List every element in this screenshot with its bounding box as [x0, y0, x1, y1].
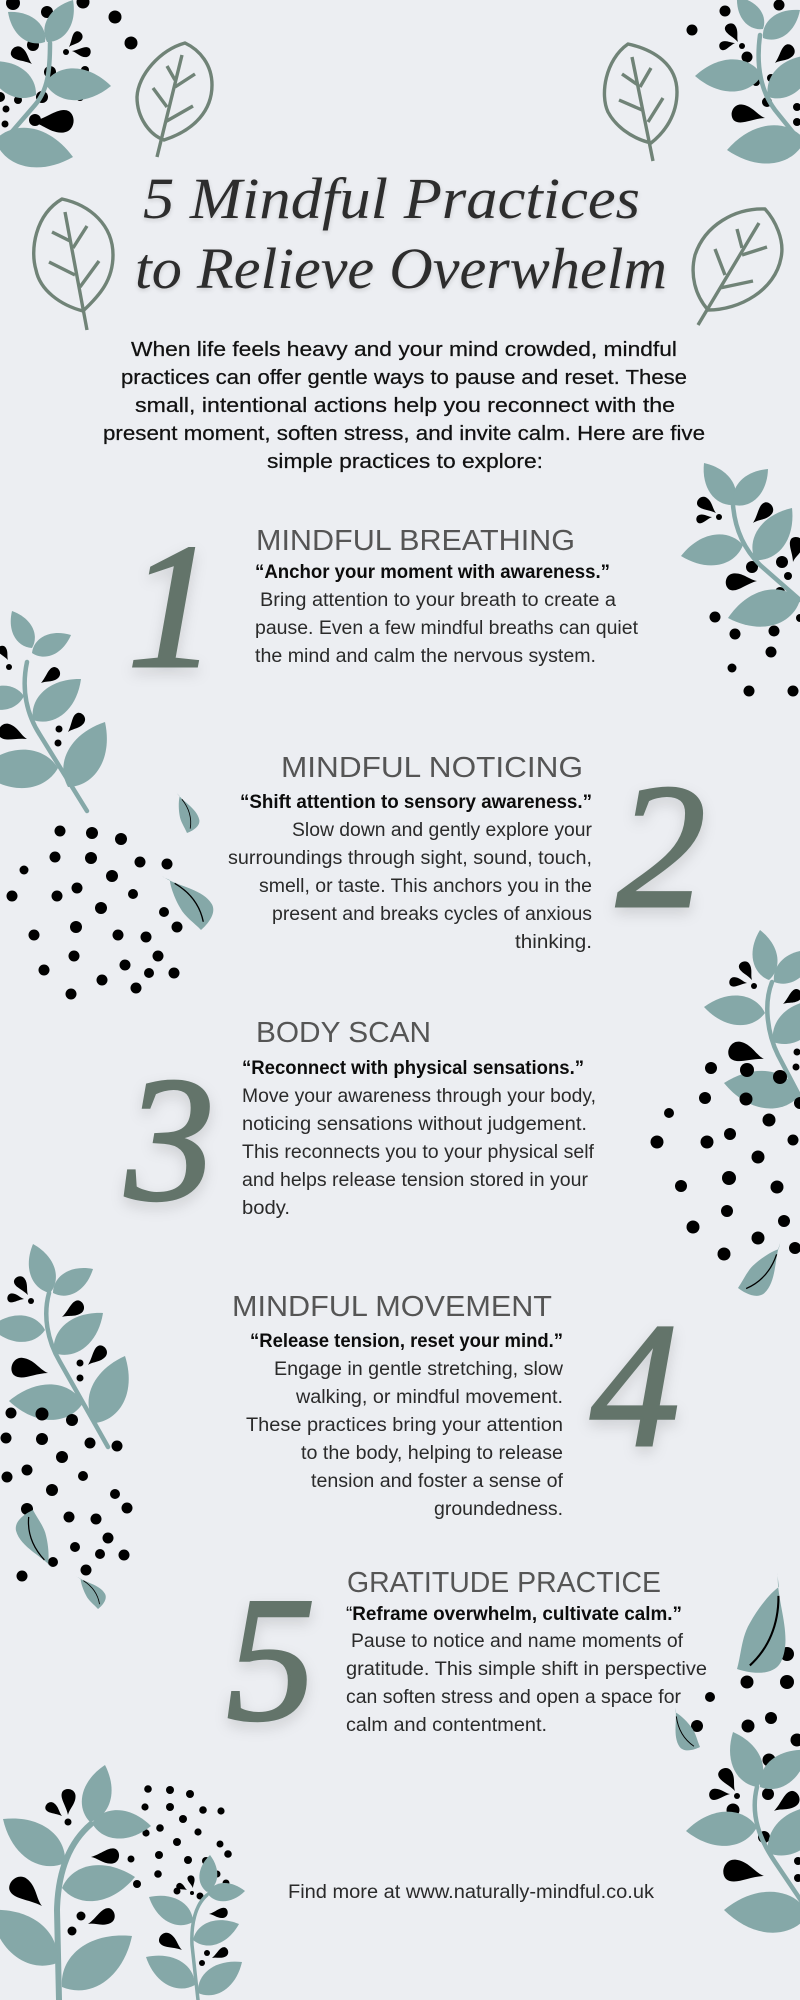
- section 2: mindful noticing: [228, 747, 706, 953]
- body 4: walking, or mindful movement.: [295, 1387, 563, 1408]
- body 2: present and breaks cycles of anxious: [272, 904, 592, 925]
- intro text: practices can offer gentle ways to pause and reset. These: [121, 366, 687, 389]
- title: 5 Mindful Practices: [143, 166, 640, 231]
- section 3: body scan: [124, 1017, 596, 1238]
- body 5: calm and contentment.: [346, 1715, 547, 1736]
- body 3: and helps release tension stored in your: [242, 1170, 589, 1191]
- body 5: [346, 1604, 707, 1736]
- body 2: “Shift attention to sensory awareness.”: [240, 792, 592, 813]
- icon: outline leaf top right: [604, 44, 677, 161]
- title: [135, 166, 667, 301]
- body 3: This reconnects you to your physical self: [242, 1142, 595, 1163]
- body 3: noticing sensations without judgement.: [242, 1114, 587, 1135]
- sprig: right of section 3 with dots: [650, 928, 800, 1304]
- sprig: bottom left large: [0, 1761, 152, 2000]
- intro text: [103, 338, 705, 473]
- title: to Relieve Overwhelm: [135, 236, 667, 301]
- body 2: thinking.: [515, 932, 592, 953]
- sprig: bottom left small: [139, 1854, 249, 2000]
- body 1: “Anchor your moment with awareness.”: [255, 562, 610, 583]
- body 5: can soften stress and open a space for: [346, 1687, 682, 1708]
- body 5: “Reframe overwhelm, cultivate calm.”: [346, 1604, 682, 1625]
- section 4: mindful movement: [232, 1286, 680, 1520]
- heading 5: GRATITUDE PRACTICE: [347, 1567, 661, 1599]
- body 4: to the body, helping to release: [301, 1443, 563, 1464]
- body 5: Pause to notice and name moments of: [351, 1631, 684, 1652]
- footer link text: Find more at www.naturally-mindful.co.uk: [288, 1882, 655, 1903]
- body 3: Move your awareness through your body,: [242, 1086, 596, 1107]
- sprig: top right: [686, 0, 800, 169]
- body 1: the mind and calm the nervous system.: [255, 646, 596, 667]
- icon: outline leaf top left: [137, 43, 212, 157]
- body 3: [242, 1058, 596, 1219]
- body 2: [228, 792, 593, 953]
- intro text: simple practices to explore:: [267, 450, 543, 473]
- intro text: present moment, soften stress, and invite calm. Here are five: [103, 422, 705, 445]
- body 2: surroundings through sight, sound, touch,: [228, 848, 592, 869]
- sprig: top left: [0, 0, 138, 176]
- body 3: body.: [242, 1198, 290, 1219]
- heading 3: BODY SCAN: [256, 1017, 431, 1049]
- icon: outline leaf right of title: [693, 209, 782, 325]
- body 5: gratitude. This simple shift in perspective: [346, 1659, 707, 1680]
- sprig: left of section 2 with dots and falling leaves: [0, 606, 220, 1000]
- icon: outline leaf left of title: [34, 199, 113, 330]
- body 3: “Reconnect with physical sensations.”: [242, 1058, 584, 1079]
- body 2: Slow down and gently explore your: [292, 820, 593, 841]
- number 5: 5: [226, 1560, 316, 1758]
- body 2: smell, or taste. This anchors you in the: [259, 876, 592, 897]
- intro text: When life feels heavy and your mind crowded, mindful: [131, 338, 677, 361]
- body 4: Engage in gentle stretching, slow: [274, 1359, 563, 1380]
- number 3: 3: [124, 1040, 214, 1238]
- body 4: “Release tension, reset your mind.”: [250, 1331, 563, 1352]
- sprig: bottom right with falling leaves: [660, 1570, 800, 1934]
- body 1: [255, 562, 639, 667]
- number 4: 4: [590, 1286, 680, 1484]
- number 1: 1: [128, 507, 216, 705]
- sprig: right of section 1: [678, 456, 800, 696]
- body 4: tension and foster a sense of: [311, 1471, 564, 1492]
- number 2: 2: [616, 747, 706, 945]
- body 4: groundedness.: [434, 1499, 563, 1520]
- heading 4: MINDFUL MOVEMENT: [232, 1291, 552, 1323]
- body 4: [246, 1331, 564, 1520]
- body 4: These practices bring your attention: [246, 1415, 563, 1436]
- sprig: left of section 4 with dots: [0, 1240, 141, 1610]
- heading 2: MINDFUL NOTICING: [281, 752, 583, 784]
- intro text: small, intentional actions help you reconnect with the: [135, 394, 675, 417]
- section 1: mindful breathing: [128, 507, 639, 705]
- body 1: Bring attention to your breath to create a: [260, 590, 616, 611]
- dot cluster: bottom left: [141, 1785, 232, 1886]
- body 1: pause. Even a few mindful breaths can quiet: [255, 618, 639, 639]
- heading 1: MINDFUL BREATHING: [256, 525, 575, 557]
- section 5: gratitude practice: [226, 1560, 707, 1758]
